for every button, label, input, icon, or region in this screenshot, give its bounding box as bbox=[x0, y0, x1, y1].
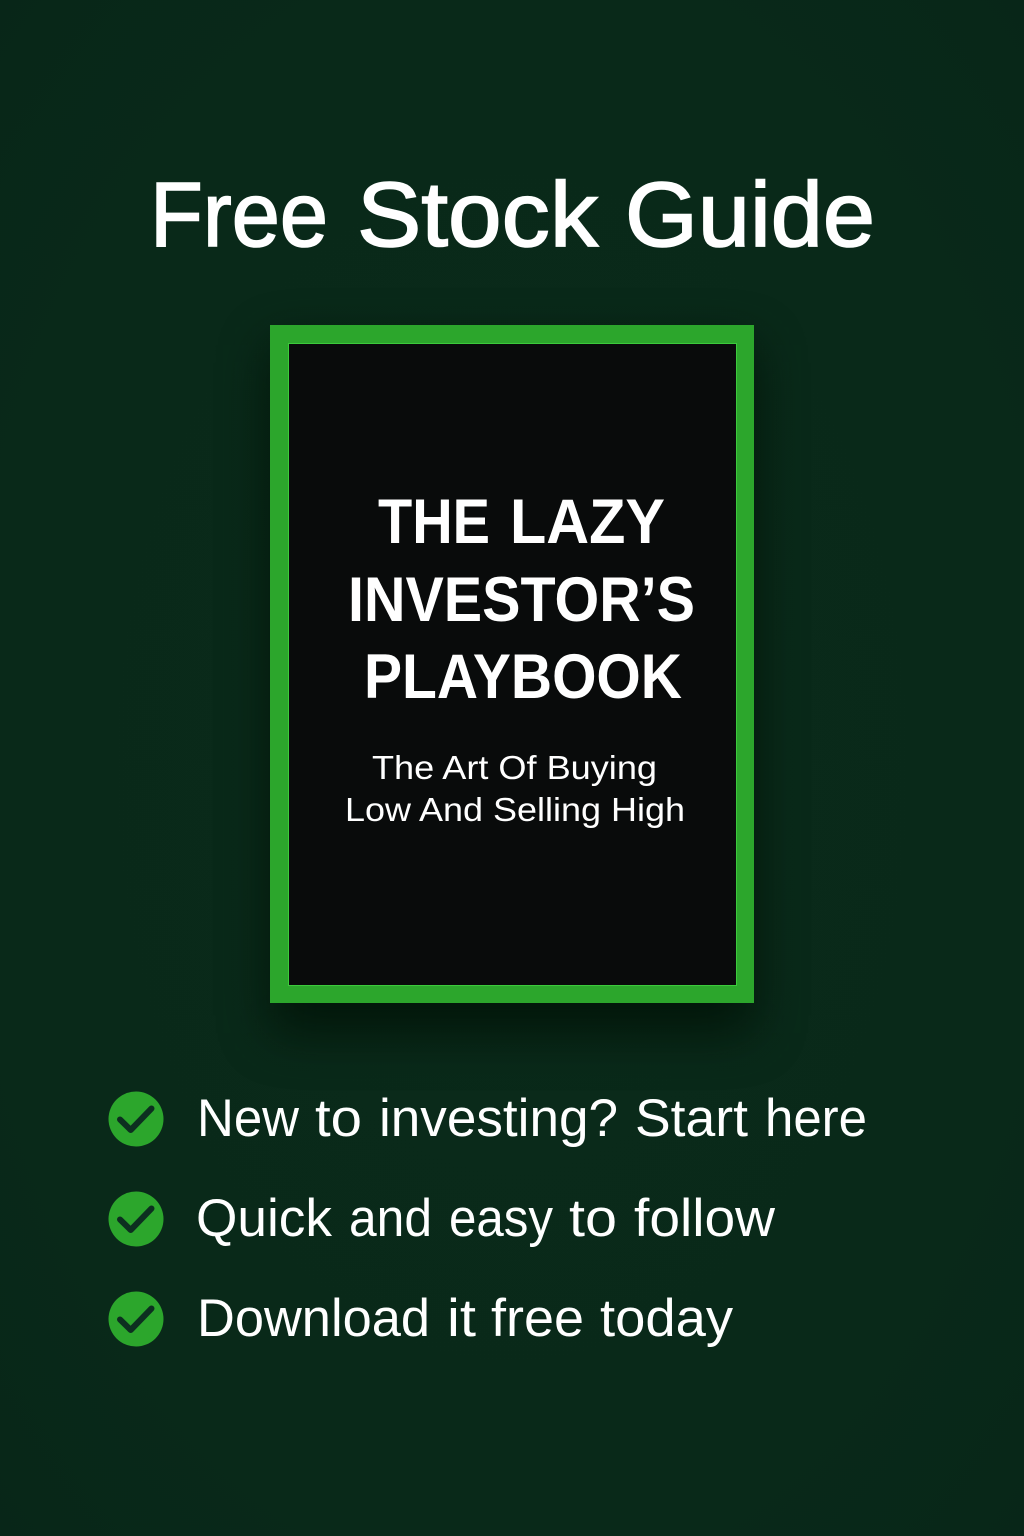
item: new to investing bbox=[108, 1089, 867, 1148]
title: Free bbox=[150, 164, 328, 266]
item: download free: today bbox=[600, 1289, 734, 1348]
item: quick and easy: follow bbox=[634, 1189, 776, 1248]
item: new to investing: New bbox=[197, 1089, 300, 1148]
title: Stock bbox=[357, 164, 599, 266]
item: new to investing: here bbox=[765, 1089, 867, 1148]
item: quick and easy: to bbox=[569, 1189, 617, 1248]
panel: book cover bbox=[270, 325, 754, 1033]
book title: THE bbox=[378, 487, 490, 557]
title: Guide bbox=[625, 164, 875, 266]
book title: LAZY bbox=[510, 487, 665, 557]
book subtitle bbox=[345, 750, 685, 829]
item: quick and easy: and bbox=[349, 1189, 432, 1248]
item: quick and easy: easy bbox=[449, 1189, 553, 1248]
book subtitle: The Art Of Buying bbox=[372, 750, 657, 787]
checklist bbox=[108, 1089, 867, 1348]
item: quick and easy: Quick bbox=[196, 1189, 332, 1248]
item: new to investing: investing? bbox=[379, 1089, 618, 1148]
item: new to investing: to bbox=[315, 1089, 362, 1148]
book title bbox=[348, 487, 695, 712]
item: download free: it bbox=[447, 1289, 476, 1348]
book title: PLAYBOOK bbox=[364, 642, 682, 712]
book subtitle: Low And Selling High bbox=[345, 792, 685, 829]
item: download free bbox=[108, 1289, 734, 1348]
item: quick and easy bbox=[108, 1189, 776, 1248]
item: download free: Download bbox=[197, 1289, 430, 1348]
book title: INVESTOR’S bbox=[348, 565, 695, 635]
item: download free: free bbox=[491, 1289, 584, 1348]
item: new to investing: Start bbox=[635, 1089, 748, 1148]
